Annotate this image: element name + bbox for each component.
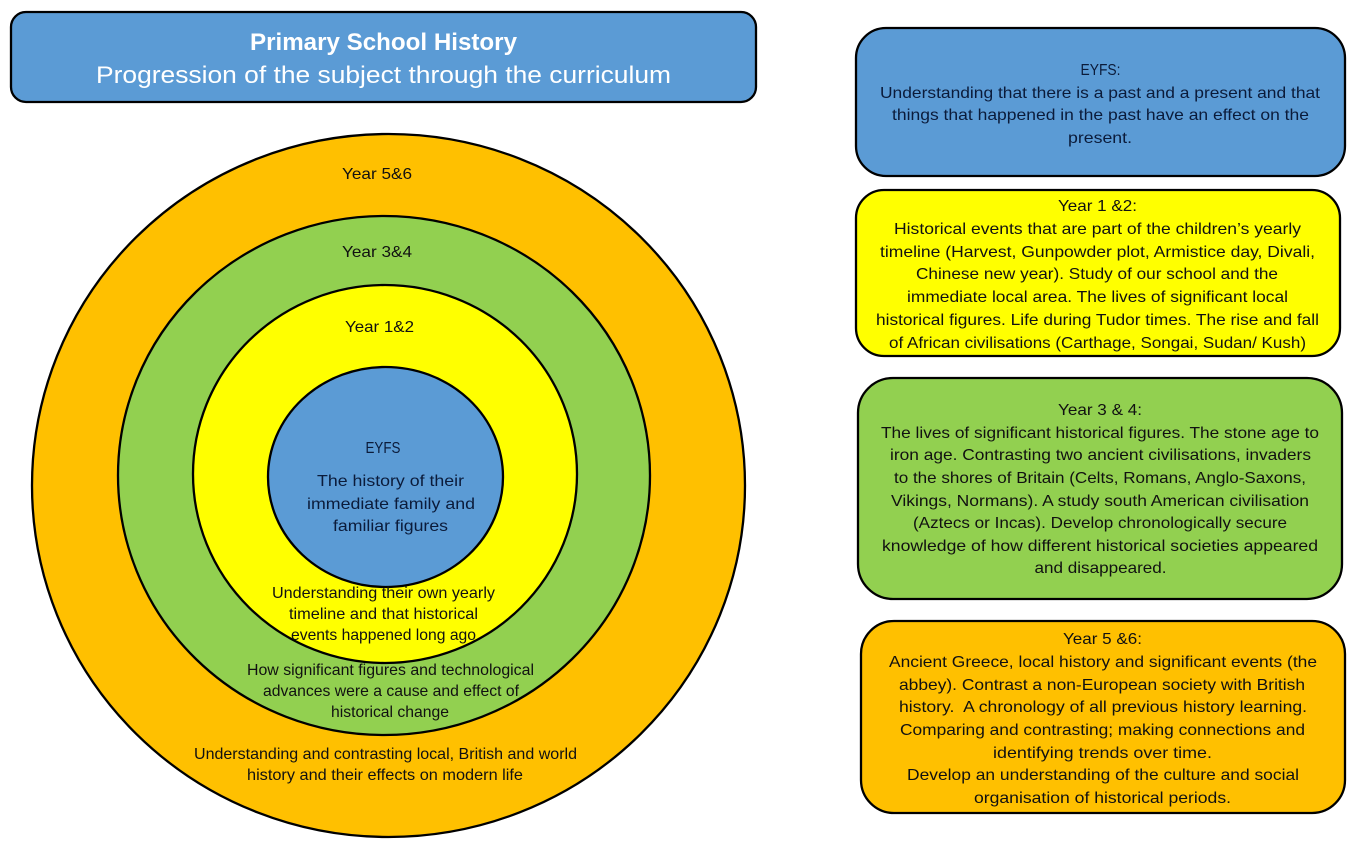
title banner [11, 12, 756, 102]
circle: EYFS: familiar figures [333, 518, 448, 535]
text: Year 5 and 6 outcome: Understanding and contrasting local, British and world [194, 746, 577, 763]
panel: Year 5 and 6: history. A chronology of all previous history learning. [899, 699, 1307, 716]
panel: Year 3 and 4: and disappeared. [1034, 560, 1166, 577]
panel: Year 5 and 6: Develop an understanding of the culture and social [907, 767, 1299, 784]
panel: Year 1 and 2: Year 1 &2: [1058, 198, 1137, 215]
circle: Year 3 and 4: Year 3&4 [342, 244, 412, 261]
text: Year 1 and 2 outcome: events happened long ago [291, 627, 476, 644]
circle: EYFS [268, 367, 503, 587]
panel: Year 3 and 4: (Aztecs or Incas). Develop chronologically secure [913, 515, 1287, 532]
panel: Year 5 and 6 [861, 621, 1345, 813]
panel: Year 1 and 2: immediate local area. The lives of significant local [907, 289, 1288, 306]
panel: Year 3 and 4: iron age. Contrasting two ancient civilisations, invaders [890, 447, 1311, 464]
text: Year 5 and 6 outcome: history and their effects on modern life [247, 767, 523, 784]
panel: Year 5 and 6: Ancient Greece, local history and significant events (the [889, 654, 1317, 671]
panel: EYFS: Understanding that there is a past and a present and that [880, 85, 1321, 102]
circle: Year 3 and 4 [118, 216, 650, 735]
panel: EYFS: things that happened in the past have an effect on the [892, 107, 1309, 124]
panel: EYFS [856, 28, 1345, 176]
panel: Year 3 and 4: to the shores of Britain (Celts, Romans, Anglo-Saxons, [894, 470, 1306, 487]
panel: Year 5 and 6: abbey). Contrast a non-European society with British [899, 677, 1305, 694]
panel: Year 3 and 4: Vikings, Normans). A study south American civilisation [891, 493, 1309, 510]
concentric circle diagram [32, 134, 745, 837]
panel: Year 5 and 6: Comparing and contrasting; making connections and [900, 722, 1305, 739]
circle: EYFS: immediate family and [307, 496, 475, 513]
text: Year 1 and 2 outcome: timeline and that historical [289, 606, 478, 623]
text: Year 1 and 2 outcome: Understanding their own yearly [272, 585, 495, 602]
panel: Year 5 and 6: organisation of historical periods. [974, 790, 1231, 807]
panel: Year 3 and 4: The lives of significant historical figures. The stone age to [881, 425, 1319, 442]
panel: Year 1 and 2: timeline (Harvest, Gunpowder plot, Armistice day, Divali, [880, 244, 1315, 261]
panel: Year 1 and 2: of African civilisations (Carthage, Songai, Sudan/ Kush) [889, 335, 1306, 352]
panel: Year 1 and 2: Chinese new year). Study of our school and the [916, 266, 1278, 283]
panel: Year 5 and 6: identifying trends over time. [993, 745, 1212, 762]
panel: Year 1 and 2: historical figures. Life during Tudor times. The rise and fall [876, 312, 1319, 329]
panel: Year 3 and 4: knowledge of how different historical societies appeared [882, 538, 1318, 555]
text: Year 5 and 6 outcome [194, 746, 577, 784]
panel: Year 1 and 2: Historical events that are part of the children’s yearly [894, 221, 1301, 238]
heading: main title: Primary School History [250, 29, 518, 56]
panel: Year 3 and 4 [858, 378, 1342, 599]
text: Year 3 and 4 outcome: advances were a cause and effect of [263, 683, 520, 700]
circle: EYFS: EYFS [366, 440, 400, 457]
circle: Year 1 and 2 [193, 285, 577, 663]
panel: Year 1 and 2 [856, 190, 1340, 356]
panel: Year 5 and 6: Year 5 &6: [1063, 631, 1142, 648]
panel: EYFS: present. [1068, 130, 1132, 147]
text: Year 3 and 4 outcome: historical change [331, 704, 449, 721]
circle: Year 1 and 2: Year 1&2 [345, 319, 414, 336]
text: Year 3 and 4 outcome [247, 662, 534, 721]
heading: subtitle: Progression of the subject through the curriculum [96, 62, 671, 89]
text: Year 1 and 2 outcome [272, 585, 495, 644]
panel: Year 3 and 4: Year 3 & 4: [1058, 402, 1142, 419]
circle: Year 5 and 6: Year 5&6 [342, 166, 412, 183]
panel: EYFS: EYFS: [1080, 62, 1120, 79]
text: Year 3 and 4 outcome: How significant figures and technological [247, 662, 534, 679]
circle: EYFS: The history of their [317, 473, 465, 490]
